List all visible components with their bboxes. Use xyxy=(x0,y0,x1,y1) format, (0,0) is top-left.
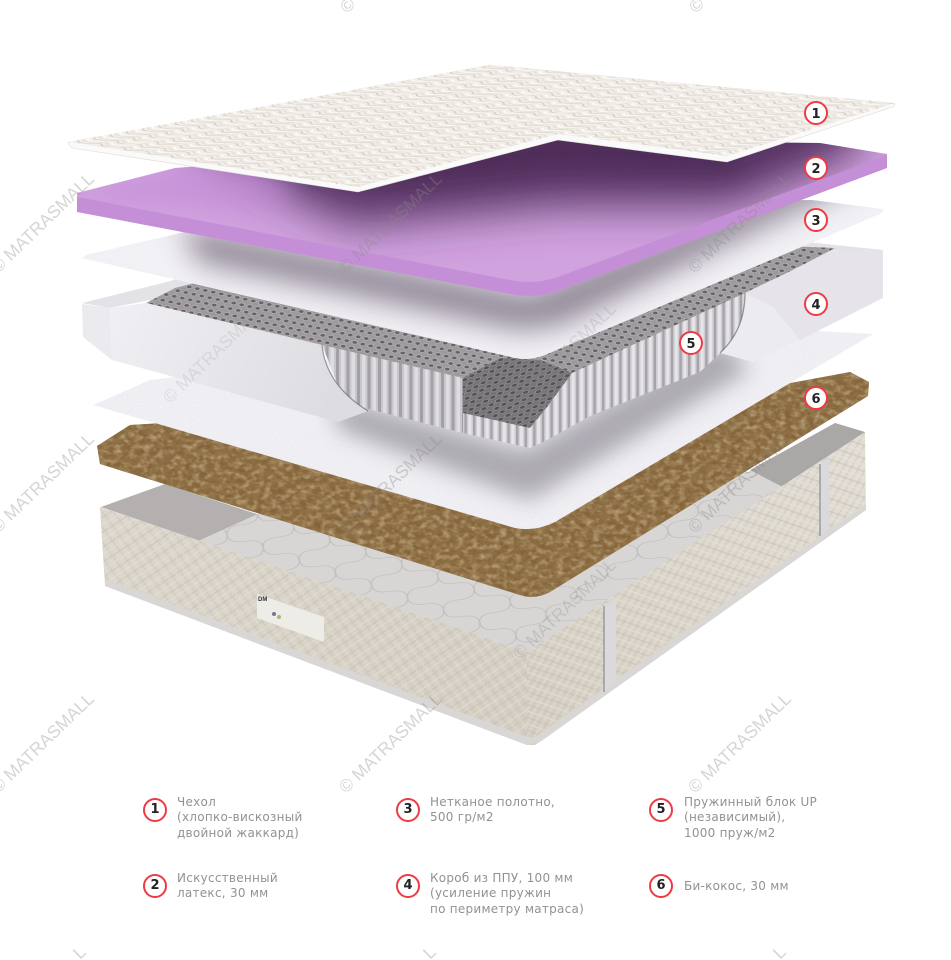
layer 2: purple latex xyxy=(77,140,887,296)
callout badge 5: 5 xyxy=(686,337,696,352)
legend item 2: латекс, 30 мм xyxy=(177,886,268,900)
callout badge 1 xyxy=(805,102,827,124)
callout badge 5 xyxy=(680,332,702,354)
watermarks: © MATRASMALL xyxy=(684,168,795,277)
springs right face xyxy=(547,293,745,440)
foam left outer side xyxy=(82,304,112,360)
legend item 3: 3 xyxy=(403,802,413,817)
side ribbon front xyxy=(604,598,616,692)
box inner left wall xyxy=(101,484,260,541)
legend item 2: Искусственный xyxy=(177,871,278,885)
callout badge 2 xyxy=(805,157,827,179)
box inner right wall xyxy=(750,423,865,520)
legend item 5: Пружинный блок UP xyxy=(684,795,817,809)
legend item 2 xyxy=(143,871,278,900)
watermarks: © MATRASMALL xyxy=(509,298,620,407)
callout badge 4 xyxy=(805,293,827,315)
legend item 4: 4 xyxy=(403,878,413,893)
foam left front piece xyxy=(110,303,368,422)
springs top surface xyxy=(146,230,835,395)
legend item 5: (независимый), xyxy=(684,810,785,824)
product label xyxy=(257,594,324,642)
callout badge 6: 6 xyxy=(811,392,821,407)
callout badge 2: 2 xyxy=(811,162,821,177)
foam back strip xyxy=(82,225,883,308)
springs left face xyxy=(322,345,463,433)
box quilted floor xyxy=(198,470,835,652)
watermarks: © MATRASMALL xyxy=(509,554,620,663)
layer: mattress cover base box xyxy=(100,423,866,745)
legend item 5: 5 xyxy=(656,802,666,817)
watermarks: © MATRASMALL xyxy=(335,688,446,797)
callout badge 6 xyxy=(805,387,827,409)
legend item 6 xyxy=(649,874,789,898)
legend item 3: 500 гр/м2 xyxy=(430,810,494,824)
legend item 6: Би-кокос, 30 мм xyxy=(684,879,789,893)
callout badge 3 xyxy=(805,209,827,231)
legend item 4: (усиление пружин xyxy=(430,886,551,900)
callout badge 4: 4 xyxy=(811,298,821,313)
foam right piece xyxy=(720,250,883,362)
legend item 1: 1 xyxy=(150,802,160,817)
watermarks: © MATRASMALL xyxy=(159,298,270,407)
callout badge 1: 1 xyxy=(811,107,821,122)
springs exposed dark corner xyxy=(463,358,572,428)
layer 5: pocket spring block xyxy=(146,230,835,448)
springs front cut corner xyxy=(463,407,547,448)
box outer right face xyxy=(527,432,866,745)
legend item 4: Короб из ППУ, 100 мм xyxy=(430,871,573,885)
legend item 5 xyxy=(649,795,817,840)
watermarks: © MATRASMALL xyxy=(335,428,446,537)
legend item 1: Чехол xyxy=(177,795,216,809)
layer: lower nonwoven sheet xyxy=(90,330,880,535)
side ribbon back xyxy=(820,458,829,536)
layer 1: quilted jacquard cover xyxy=(60,60,900,195)
layer 6: bi-coconut board xyxy=(90,370,880,605)
legend item 1: (хлопко-вискозный xyxy=(177,810,303,824)
legend item 1 xyxy=(143,795,303,840)
legend item 6: 6 xyxy=(656,878,666,893)
legend item 3 xyxy=(396,795,555,824)
legend item 3: Нетканое полотно, xyxy=(430,795,555,809)
layer 4: foam perimeter box xyxy=(82,250,883,422)
legend item 4 xyxy=(396,871,584,916)
legend item 2: 2 xyxy=(150,878,160,893)
callout badge 3: 3 xyxy=(811,214,821,229)
layer 3: upper nonwoven sheet xyxy=(82,200,883,359)
watermarks: © MATRASMALL xyxy=(684,688,795,797)
legend item 1: двойной жаккард) xyxy=(177,826,299,840)
watermarks: © MATRASMALL xyxy=(335,168,446,277)
box outer left face xyxy=(100,507,527,745)
product label: DM xyxy=(258,597,267,603)
legend item 4: по периметру матраса) xyxy=(430,902,584,916)
watermarks: © MATRASMALL xyxy=(684,428,795,537)
legend item 5: 1000 пруж/м2 xyxy=(684,826,776,840)
